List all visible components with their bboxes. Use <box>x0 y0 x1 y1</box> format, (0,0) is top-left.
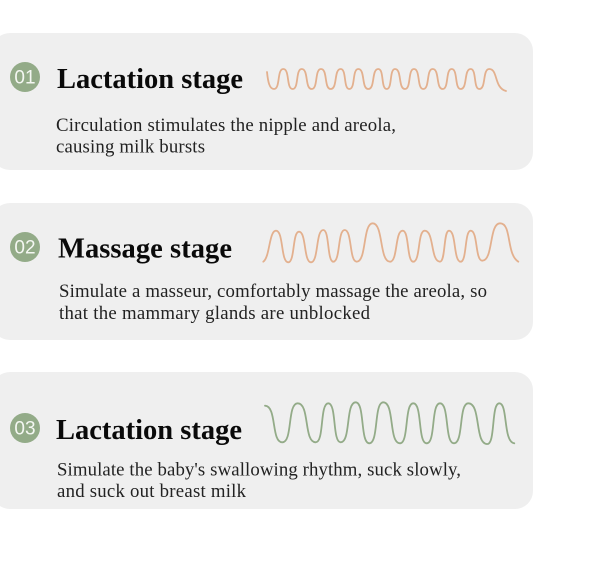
wave: orange low rhythm <box>267 69 506 91</box>
text block: description 01: causing milk bursts <box>56 136 205 158</box>
text block: description 01: Circulation stimulates the nipple and areola, <box>56 115 396 136</box>
icon: number badge 02 <box>10 232 40 262</box>
panel: 01 lactation stage <box>0 33 533 170</box>
wave: orange massage rhythm <box>263 223 518 262</box>
text block: description 03: and suck out breast milk <box>57 481 247 502</box>
text block: description 01 <box>56 115 396 158</box>
text block: description 02: Simulate a masseur, comfortably massage the areola, so <box>59 281 487 302</box>
text block: description 02: that the mammary glands are unblocked <box>59 303 371 324</box>
icon: number badge 02: 02 <box>14 238 36 258</box>
icon: number badge 01 <box>10 62 40 92</box>
text block: description 03: Simulate the baby's swallowing rhythm, suck slowly, <box>57 460 461 480</box>
heading: lactation stage: Lactation stage <box>57 64 243 95</box>
icon: number badge 01: 01 <box>14 68 36 88</box>
text block: description 03 <box>57 460 461 502</box>
wave: green swallowing rhythm <box>265 402 514 444</box>
heading: massage stage: Massage stage <box>58 234 232 264</box>
heading: lactation stage: Lactation stage <box>56 415 242 446</box>
icon: number badge 03 <box>10 413 40 443</box>
panel: 03 lactation stage <box>0 372 533 509</box>
icon: number badge 03: 03 <box>14 418 36 440</box>
panel: 02 massage stage <box>0 203 533 340</box>
text block: description 02 <box>59 281 487 324</box>
